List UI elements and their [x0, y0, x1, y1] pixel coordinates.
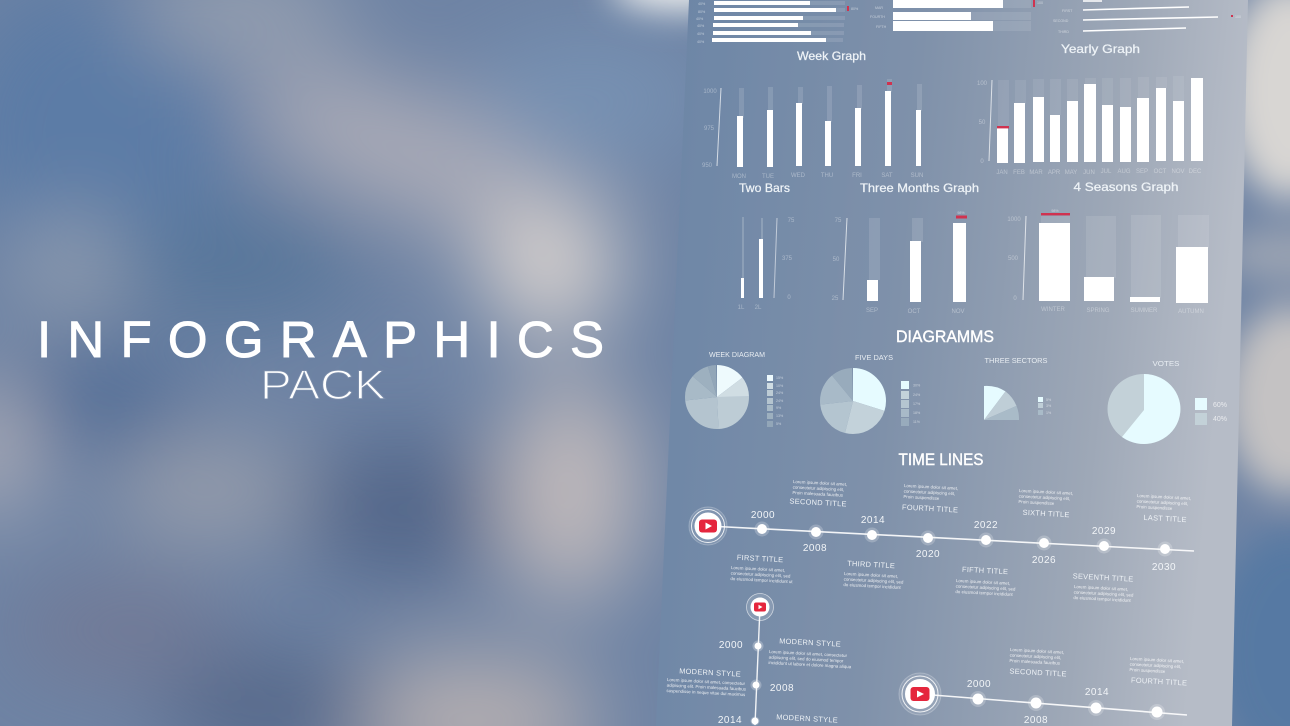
- lorem text blocks: suspendisse in neque vitae dui maximus: [666, 688, 746, 697]
- heading: Three Months Graph: Three Months Graph: [860, 181, 979, 195]
- bar chart: three months: NOV: [951, 309, 965, 315]
- subtitle: PACK: PACK: [260, 361, 386, 408]
- years: 2029: [1092, 526, 1116, 537]
- bar chart: four seasons: 98%: [1051, 209, 1059, 213]
- lorem text blocks: consectetur adipiscing elit,: [1130, 661, 1181, 669]
- lorem text blocks: do eiusmod tempor incididunt: [843, 582, 902, 590]
- years: 2030: [1152, 562, 1176, 573]
- milestone titles: [1009, 667, 1187, 687]
- bar chart: months: SEP: [1136, 169, 1148, 175]
- legend: 60%: [1213, 402, 1227, 409]
- bar chart: weekdays: WED: [791, 173, 806, 179]
- milestone titles: SECOND TITLE: [1009, 667, 1067, 678]
- legend: 17%: [913, 402, 921, 406]
- title: [37, 311, 604, 408]
- bar chart: weekdays: 950: [702, 163, 713, 169]
- bar chart: four seasons: 0: [1013, 296, 1017, 302]
- timeline nodes: [970, 691, 1165, 720]
- chart: week graph top bars: 80%: [851, 7, 859, 11]
- lorem text blocks: Lorem ipsum dolor sit amet,: [956, 578, 1010, 586]
- bar chart: months: MAY: [1065, 170, 1077, 176]
- bar chart: two bars: 375: [782, 256, 793, 262]
- years: 2022: [974, 520, 998, 531]
- heading: DIAGRAMMS: DIAGRAMMS: [896, 327, 994, 346]
- lorem text blocks: consectetur adipiscing elit,: [1137, 498, 1188, 506]
- bar chart: months: 50: [979, 120, 986, 126]
- chart: week graph top bars: 40%: [697, 32, 705, 36]
- milestone titles: FIFTH TITLE: [962, 565, 1008, 576]
- bar chart: four seasons: SUMMER: [1131, 308, 1158, 314]
- legend: 9%: [776, 406, 782, 410]
- lorem text blocks: adipiscing elit. Proin malesuada faucibus: [667, 682, 747, 692]
- heading: TIME LINES: TIME LINES: [898, 450, 984, 469]
- bar chart: three months: 50: [833, 257, 840, 263]
- legend: 5%: [776, 422, 782, 426]
- lorem text blocks: consectetur adipiscing elit, sed: [1074, 589, 1134, 598]
- years: 2026: [1032, 555, 1056, 566]
- bar chart: months: [977, 76, 1203, 176]
- years: 2014: [718, 715, 742, 726]
- bar chart: weekdays: SUN: [911, 173, 923, 179]
- chart: right top thin bars: 100: [1235, 15, 1241, 19]
- legend: 24%: [913, 393, 921, 397]
- milestone titles: [679, 636, 841, 725]
- label: WEEK DIAGRAM: WEEK DIAGRAM: [709, 350, 765, 359]
- pie chart: votes: [1108, 359, 1227, 444]
- chart: middle top bars: MAR: [875, 6, 883, 10]
- label: FIVE DAYS: FIVE DAYS: [855, 353, 893, 362]
- milestone titles: LAST TITLE: [1143, 513, 1187, 524]
- bar chart: months: OCT: [1154, 169, 1167, 175]
- lorem text blocks: [730, 479, 1191, 603]
- bar chart: weekdays: MON: [732, 174, 746, 180]
- timeline: horizontal main: [689, 479, 1194, 603]
- bar chart: months: DEC: [1189, 169, 1202, 175]
- heading: Yearly Graph: Yearly Graph: [1061, 42, 1140, 56]
- bar chart: months: NOV: [1171, 169, 1185, 175]
- milestone titles: MODERN STYLE: [679, 666, 741, 679]
- label: VOTES: VOTES: [1152, 359, 1180, 368]
- chart: week graph top bars: [696, 1, 859, 44]
- pie chart: week diagram: [701, 350, 784, 427]
- lorem text blocks: [1009, 647, 1184, 675]
- lorem text blocks: Lorem ipsum dolor sit amet,: [731, 565, 785, 573]
- bar chart: months: APR: [1048, 170, 1061, 176]
- lorem text blocks: Proin malesuada faucibus: [1009, 658, 1061, 666]
- years: 2008: [770, 683, 794, 694]
- bar chart: three months: OCT: [908, 309, 921, 315]
- bar chart: two bars: 75: [788, 218, 795, 224]
- bar chart: weekdays: TUE: [762, 174, 774, 180]
- chart: right top thin bars: THIRD: [1058, 30, 1069, 34]
- bar chart: three months: [832, 211, 967, 315]
- bar chart: weekdays: 1000: [703, 89, 717, 95]
- legend: [901, 381, 921, 426]
- lorem text blocks: do eiusmod tempor incididunt ut: [730, 576, 794, 584]
- bar chart: four seasons: [1007, 209, 1209, 315]
- legend: 13%: [776, 414, 784, 418]
- label: THREE SECTORS: THREE SECTORS: [984, 356, 1048, 365]
- lorem text blocks: Proin suspendisse: [1129, 667, 1166, 674]
- lorem text blocks: Lorem ipsum dolor sit amet, consectetur: [667, 677, 746, 686]
- lorem text blocks: adipiscing elit, sed do eiusmod tempor: [769, 654, 844, 663]
- bar chart: months: MAR: [1029, 170, 1043, 176]
- bar chart: months: JUL: [1101, 169, 1112, 175]
- legend: [1038, 397, 1052, 415]
- bar chart: three months: 75: [835, 218, 842, 224]
- milestone titles: SEVENTH TITLE: [1073, 571, 1134, 584]
- milestone titles: FOURTH TITLE: [1131, 676, 1187, 687]
- lorem text blocks: consectetur adipiscing elit, sed: [844, 576, 904, 585]
- years: 2000: [751, 510, 775, 521]
- chart: right top thin bars: SECOND: [1053, 19, 1069, 23]
- timeline nodes: [754, 522, 1172, 556]
- chart: middle top bars: FIFTH: [876, 25, 887, 29]
- years: 2014: [1085, 687, 1109, 698]
- bar chart: four seasons: AUTUMN: [1178, 309, 1204, 315]
- bar chart: months: JAN: [996, 170, 1008, 176]
- chart: week graph top bars: 40%: [697, 24, 705, 28]
- pie chart: five days: [836, 353, 921, 426]
- icon: play badge small: [746, 594, 774, 620]
- bar chart: four seasons: WINTER: [1041, 307, 1065, 313]
- lorem text blocks: incididunt ut labore et dolore magna aliqua: [768, 660, 852, 669]
- timeline nodes: [750, 640, 764, 726]
- legend: 24%: [776, 399, 784, 403]
- lorem text blocks: Proin suspendisse: [1018, 499, 1055, 506]
- legend: 30%: [913, 384, 921, 388]
- timeline: vertical: [666, 594, 852, 726]
- lorem text blocks: consectetur adipiscing elit,: [1019, 493, 1070, 501]
- bar chart: weekdays: THU: [821, 173, 833, 179]
- bar chart: three months: SEP: [866, 308, 878, 314]
- lorem text blocks: consectetur adipiscing elit,: [1010, 652, 1061, 660]
- bar chart: two bars: 0: [787, 295, 791, 301]
- legend: 1%: [1046, 411, 1052, 415]
- legend: 24%: [776, 391, 784, 395]
- legend: 11%: [913, 420, 921, 424]
- lorem text blocks: Lorem ipsum dolor sit amet,: [844, 571, 898, 579]
- lorem text blocks: do eiusmod tempor incididunt: [1073, 595, 1132, 603]
- milestone titles: [737, 497, 1187, 584]
- lorem text blocks: Lorem ipsum dolor sit amet,: [904, 483, 958, 491]
- bar chart: four seasons: SPRING: [1086, 308, 1110, 314]
- milestone titles: SIXTH TITLE: [1022, 508, 1070, 519]
- lorem text blocks: Proin suspendisse: [903, 494, 940, 501]
- pie chart: three sectors: [984, 356, 1052, 420]
- milestone titles: SECOND TITLE: [789, 497, 847, 508]
- heading: 4 Seasons Graph: 4 Seasons Graph: [1074, 180, 1178, 194]
- bar chart: three months: 98%: [957, 211, 965, 215]
- icon: play badge: [689, 507, 727, 545]
- lorem text blocks: [666, 649, 852, 697]
- lorem text blocks: do eiusmod tempor incididunt: [955, 589, 1014, 597]
- title line: INFOGRAPHICS: INFOGRAPHICS: [37, 311, 604, 368]
- heading: Week Graph: Week Graph: [797, 49, 866, 63]
- bar chart: two bars: 2L: [755, 305, 762, 311]
- bar chart: weekdays: SAT: [881, 173, 893, 179]
- lorem text blocks: consectetur adipiscing elit,: [904, 488, 955, 496]
- chart: middle top bars: 100: [1037, 1, 1043, 5]
- lorem text blocks: Lorem ipsum dolor sit amet,: [1010, 647, 1064, 655]
- lorem text blocks: Lorem ipsum dolor sit amet,: [1019, 488, 1073, 496]
- lorem text blocks: consectetur adipiscing elit, sed: [731, 570, 791, 579]
- years: 2000: [719, 640, 743, 651]
- lorem text blocks: Proin malesuada faucibus: [792, 490, 844, 498]
- milestone titles: FIRST TITLE: [737, 553, 784, 564]
- legend: [767, 375, 784, 427]
- years: 2008: [1024, 715, 1048, 726]
- chart: right top thin bars: [1053, 1, 1241, 34]
- milestone titles: FOURTH TITLE: [902, 503, 958, 514]
- legend: 5%: [1046, 398, 1052, 402]
- years: 2014: [861, 515, 885, 526]
- years: 2000: [967, 679, 991, 690]
- chart: right top thin bars: FIRST: [1062, 9, 1073, 13]
- bar chart: two bars: [738, 217, 795, 311]
- bar chart: four seasons: 500: [1008, 256, 1019, 262]
- bar chart: two bars: 1L: [738, 305, 745, 311]
- lorem text blocks: Lorem ipsum dolor sit amet,: [1074, 584, 1128, 592]
- milestone titles: THIRD TITLE: [847, 559, 895, 570]
- lorem text blocks: consectetur adipiscing elit,: [793, 484, 844, 492]
- bar chart: months: JUN: [1083, 170, 1095, 176]
- bar chart: weekdays: FRI: [852, 173, 862, 179]
- years: 2008: [803, 543, 827, 554]
- legend: 18%: [913, 411, 921, 415]
- years: [718, 640, 794, 726]
- years: [967, 679, 1109, 726]
- lorem text blocks: Lorem ipsum dolor sit amet,: [1130, 656, 1184, 664]
- bar chart: weekdays: [702, 79, 923, 180]
- icon: play badge: [899, 673, 941, 715]
- bar chart: months: AUG: [1117, 169, 1131, 175]
- bar chart: months: 0: [980, 159, 984, 165]
- milestone titles: MODERN STYLE: [776, 712, 838, 725]
- lorem text blocks: Proin suspendisse: [1136, 504, 1173, 511]
- legend: [1195, 398, 1227, 425]
- bar chart: months: 100: [977, 81, 988, 87]
- lorem text blocks: consectetur adipiscing elit, sed: [956, 583, 1016, 592]
- bar chart: months: FEB: [1013, 170, 1025, 176]
- bar chart: three months: 25: [832, 296, 839, 302]
- chart: week graph top bars: 40%: [697, 40, 705, 44]
- years: 2020: [916, 549, 940, 560]
- timeline: lower right: [899, 647, 1187, 726]
- chart: week graph top bars: 40%: [696, 17, 704, 21]
- lorem text blocks: Lorem ipsum dolor sit amet,: [1137, 493, 1191, 501]
- chart: week graph top bars: 40%: [698, 2, 706, 6]
- chart: middle top bars: FOURTH: [870, 15, 885, 19]
- legend: 15%: [776, 376, 784, 380]
- heading: Two Bars: Two Bars: [739, 181, 790, 195]
- years: [751, 510, 1176, 573]
- chart: week graph top bars: 80%: [698, 10, 706, 14]
- legend: 40%: [1213, 416, 1227, 423]
- legend: 10%: [776, 384, 784, 388]
- bar chart: four seasons: 1000: [1007, 217, 1021, 223]
- infographic sheet panel: [656, 0, 1248, 726]
- lorem text blocks: Lorem ipsum dolor sit amet,: [793, 479, 847, 487]
- chart: middle top bars: [870, 0, 1043, 31]
- legend: 3%: [1046, 404, 1052, 408]
- milestone titles: MODERN STYLE: [779, 636, 841, 649]
- lorem text blocks: Lorem ipsum dolor sit amet, consectetur: [769, 649, 848, 658]
- bar chart: weekdays: 975: [704, 126, 715, 132]
